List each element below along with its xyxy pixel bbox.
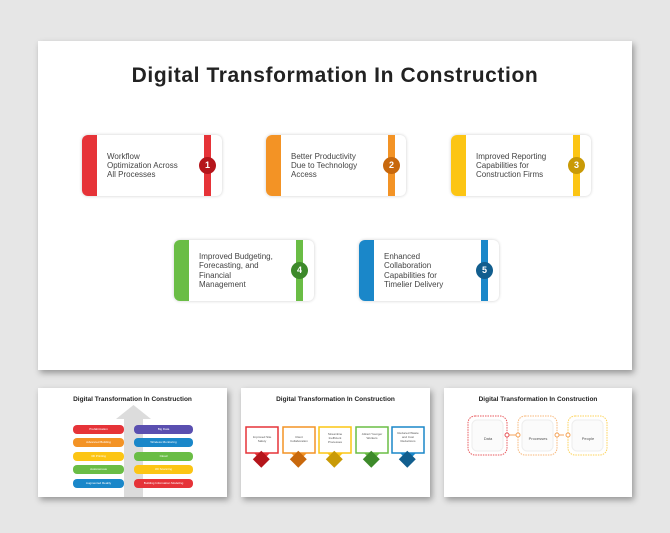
card 1: Optimization Across [107, 161, 178, 170]
card 1: 1 [205, 160, 210, 170]
card 3: Construction Firms [476, 170, 543, 179]
card 5: Capabilities for [384, 270, 437, 280]
thumbnail 2 [241, 388, 430, 497]
card 2: 2 [389, 160, 394, 170]
card 3: Capabilities for [476, 161, 529, 170]
thumb title: Digital Transformation In Construction [479, 396, 597, 403]
boxes: Processes [328, 440, 342, 444]
card 4: Management [199, 280, 246, 289]
process diagram: Data [484, 436, 493, 441]
bars: Cloud [160, 454, 167, 458]
card 5: Collaboration [384, 261, 431, 270]
thumbnail 3 [444, 388, 632, 497]
title: Digital Transformation In Construction [132, 64, 538, 87]
process diagram [468, 416, 608, 456]
bars: 3D Printing [91, 454, 106, 458]
arrow [116, 405, 151, 497]
boxes: Reduced Waste [397, 431, 419, 435]
card 1: Workflow [107, 152, 140, 161]
bars: Big Data [158, 427, 169, 431]
boxes: Collaboration [290, 439, 308, 443]
thumbnail 1 [38, 388, 227, 497]
bars: Augmented Reality [86, 481, 111, 485]
card 2: Access [291, 170, 317, 179]
card 5: 5 [482, 265, 487, 275]
process diagram: People [582, 436, 595, 441]
card 4: Improved Budgeting, [199, 252, 273, 261]
process diagram: Processes [529, 436, 547, 441]
thumb title: Digital Transformation In Construction [276, 396, 395, 403]
card 2: Due to Technology [291, 161, 357, 170]
card 2: Better Productivity [291, 152, 356, 161]
card 4 [174, 240, 314, 301]
card 5: Enhanced [384, 252, 420, 261]
bars [73, 425, 193, 488]
boxes: Safety [258, 439, 267, 443]
bars: Prefabrication [89, 427, 108, 431]
card 1: All Processes [107, 170, 155, 179]
card 1 [82, 135, 222, 196]
bars: Autonomous [90, 467, 107, 471]
boxes: and Cost [402, 435, 414, 439]
boxes [245, 426, 425, 468]
boxes: Workers [366, 436, 378, 440]
card 2 [266, 135, 406, 196]
card 4: 4 [297, 265, 302, 275]
boxes: Reductions [400, 439, 416, 443]
bars: Advanced Building [86, 440, 111, 444]
bars: Wireless Monitoring [150, 440, 177, 444]
card 3: 3 [574, 160, 579, 170]
boxes: Improved Site [253, 435, 272, 439]
thumb title: Digital Transformation In Construction [73, 396, 192, 403]
card 4: Financial [199, 270, 231, 280]
bars: 3D Scanning [155, 467, 172, 471]
card 3 [451, 135, 591, 196]
boxes: Inefficient [329, 436, 342, 440]
card 4: Forecasting, and [199, 261, 259, 270]
card 3: Improved Reporting [476, 152, 546, 161]
boxes: Attract Younger [362, 432, 382, 436]
main slide [38, 41, 632, 370]
bars: Building Information Modeling [144, 481, 183, 485]
card 5 [359, 240, 499, 301]
card 5: Timelier Delivery [384, 280, 443, 289]
boxes: Client [295, 435, 303, 439]
boxes: Streamline [328, 432, 342, 436]
